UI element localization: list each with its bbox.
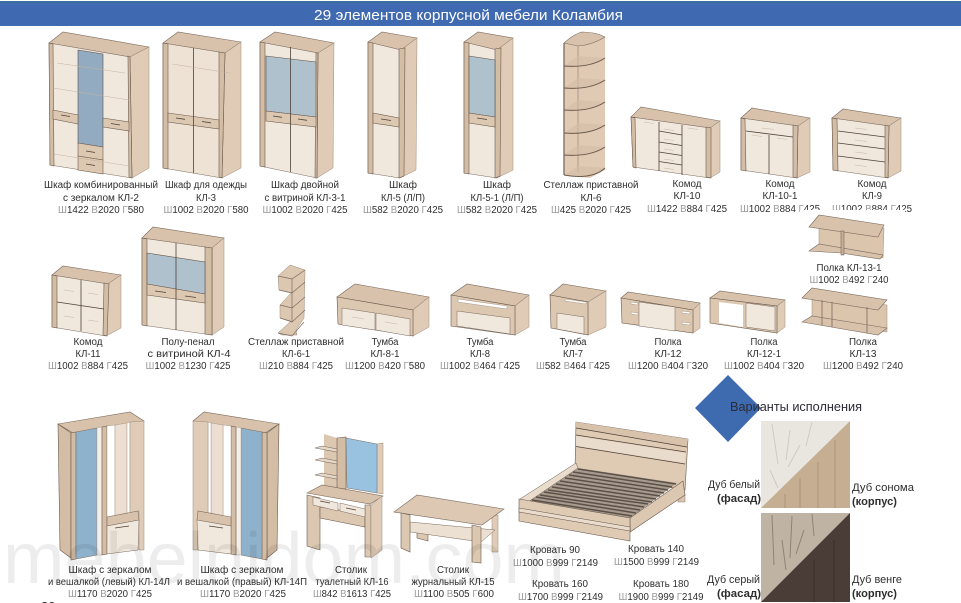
label KL-6: КЛ-6 bbox=[580, 193, 602, 204]
label KL-3: Шкаф для одежды bbox=[165, 179, 247, 191]
label KL-5-1: КЛ-5-1 (Л/П) bbox=[470, 193, 524, 204]
label: sonoma oak body: Дуб сонома bbox=[852, 482, 915, 494]
label: white oak facade: Дуб белый bbox=[708, 479, 760, 491]
label KL-5-1: Шкаф bbox=[483, 179, 511, 191]
wall shelf KL-12-1 bbox=[710, 291, 785, 333]
label KL-3 bbox=[164, 179, 249, 216]
label KL-13: Полка bbox=[849, 337, 877, 348]
label KL-14L bbox=[48, 564, 170, 600]
label KL-4: Полу-пенал bbox=[162, 337, 215, 348]
wardrobe KL-5 bbox=[368, 32, 417, 178]
label KL-8-1: Ш1200 В420 Г580 bbox=[345, 361, 425, 372]
label KL-15: Ш1100 В505 Г600 bbox=[414, 589, 494, 600]
label: wenge oak body bbox=[852, 574, 902, 600]
label KL-7 bbox=[536, 336, 610, 372]
label KL-6: Ш425 В2020 Г425 bbox=[551, 205, 631, 216]
label KL-12 bbox=[628, 337, 708, 372]
label KL-9: КЛ-9 bbox=[862, 191, 882, 202]
label KL-5: Ш582 В2020 Г425 bbox=[363, 205, 443, 216]
label KL-6-1: КЛ-6-1 bbox=[282, 349, 310, 360]
label KL-7: Ш582 В464 Г425 bbox=[536, 361, 610, 372]
label KL-16: туалетный КЛ-16 bbox=[316, 577, 389, 588]
label bed 180: Ш1900 В999 Г2149 bbox=[618, 592, 704, 603]
label KL-6: Стеллаж приставной bbox=[544, 180, 638, 191]
label KL-2: Ш1422 В2020 Г580 bbox=[58, 205, 144, 216]
label KL-3: КЛ-3 bbox=[196, 193, 216, 204]
label KL-13-1 bbox=[810, 263, 889, 286]
half cabinet KL-4 bbox=[142, 227, 224, 335]
label KL-13: Ш1200 В492 Г240 bbox=[823, 361, 903, 372]
label KL-12-1: КЛ-12-1 bbox=[747, 349, 781, 360]
label KL-10-1: КЛ-10-1 bbox=[762, 191, 798, 202]
wall shelf KL-13-1 bbox=[809, 215, 884, 259]
white backing of shelf KL-13-1 bbox=[800, 210, 905, 220]
label KL-10: КЛ-10 bbox=[674, 191, 701, 202]
TV stand KL-8 bbox=[451, 284, 529, 335]
label bed 160: Ш1700 В999 Г2149 bbox=[518, 592, 603, 603]
label KL-9 bbox=[832, 179, 912, 215]
label KL-9: Ш1002 В884 Г425 bbox=[832, 204, 912, 215]
label KL-10: Комод bbox=[672, 179, 702, 190]
label: wenge oak body: (корпус) bbox=[852, 588, 897, 600]
wardrobe KL-3 bbox=[163, 32, 241, 178]
label KL-6-1 bbox=[248, 337, 344, 372]
label bed 140 bbox=[614, 544, 699, 568]
label KL-8 bbox=[440, 336, 520, 372]
wall shelf KL-12 bbox=[621, 292, 700, 333]
label KL-8-1 bbox=[345, 336, 425, 372]
label KL-5 bbox=[363, 179, 443, 216]
corner shelving KL-6 bbox=[564, 32, 605, 178]
bed bbox=[519, 422, 688, 541]
label KL-4 bbox=[146, 337, 231, 372]
label: sonoma oak body bbox=[852, 482, 915, 508]
label bed 90: Кровать 90 bbox=[530, 545, 580, 556]
label KL-6-1: Стеллаж приставной bbox=[248, 337, 344, 348]
label KL-8: Ш1002 В464 Г425 bbox=[440, 361, 520, 372]
label KL-13-1: Полка КЛ-13-1 bbox=[816, 263, 882, 274]
coffee table KL-15 bbox=[394, 495, 504, 563]
label KL-14P: Шкаф с зеркалом bbox=[200, 564, 284, 576]
label KL-9: Комод bbox=[858, 179, 887, 190]
label KL-8: Тумба bbox=[466, 336, 494, 348]
chest of drawers KL-9 bbox=[832, 109, 901, 178]
TV stand KL-7 bbox=[550, 284, 606, 335]
heading: finish options: Варианты исполнения bbox=[730, 400, 862, 414]
label KL-11: КЛ-11 bbox=[76, 349, 101, 360]
label KL-3-1: Шкаф двойной bbox=[271, 179, 339, 191]
label bed 180 bbox=[618, 579, 704, 603]
label KL-13: КЛ-13 bbox=[850, 349, 877, 360]
label KL-3-1: Ш1002 В2020 Г425 bbox=[262, 205, 348, 216]
label KL-8-1: КЛ-8-1 bbox=[370, 349, 400, 360]
wardrobe KL-14L bbox=[58, 412, 144, 560]
diamond accent bbox=[695, 375, 761, 442]
label KL-8: КЛ-8 bbox=[470, 349, 490, 360]
swatch: grey oak / wenge bbox=[761, 513, 850, 602]
label KL-12: КЛ-12 bbox=[654, 349, 682, 360]
label KL-4: с витриной КЛ-4 bbox=[148, 349, 231, 360]
TV stand KL-8-1 bbox=[337, 284, 429, 336]
label KL-16 bbox=[313, 565, 391, 600]
label KL-13 bbox=[823, 337, 903, 372]
label KL-5-1 bbox=[457, 179, 537, 216]
label KL-3-1 bbox=[262, 179, 348, 216]
label KL-14L: Шкаф с зеркалом bbox=[68, 564, 152, 576]
swatch: white oak / sonoma oak bbox=[761, 421, 850, 508]
title banner: 29 элементов корпусной мебели Коламбия bbox=[314, 7, 623, 24]
label bed 160: Кровать 160 bbox=[532, 579, 588, 590]
label KL-12-1 bbox=[724, 337, 804, 372]
label bed 160 bbox=[518, 579, 603, 603]
label KL-11: Ш1002 В884 Г425 bbox=[48, 361, 128, 372]
label KL-14P bbox=[177, 564, 307, 600]
label KL-12-1: Ш1002 В404 Г320 bbox=[724, 361, 804, 372]
label KL-15 bbox=[412, 565, 495, 600]
dressing table KL-16 bbox=[307, 434, 383, 558]
label KL-7: КЛ-7 bbox=[563, 349, 583, 360]
label KL-2 bbox=[44, 179, 158, 216]
label: white oak facade: (фасад) bbox=[717, 493, 761, 505]
label: white oak facade bbox=[708, 479, 761, 505]
label: grey oak facade: Дуб серый bbox=[707, 574, 760, 586]
label KL-12: Ш1200 В404 Г320 bbox=[628, 361, 708, 372]
label KL-16: Столик bbox=[335, 565, 368, 576]
chest of drawers KL-11 bbox=[52, 266, 121, 336]
label bed 90: Ш1000 В999 Г2149 bbox=[513, 558, 598, 569]
label KL-8-1: Тумба bbox=[372, 336, 399, 348]
chest of drawers KL-10-1 bbox=[741, 108, 810, 178]
label KL-5: Шкаф bbox=[389, 179, 417, 191]
label KL-15: журнальный КЛ-15 bbox=[412, 577, 495, 588]
label KL-11: Комод bbox=[74, 337, 103, 348]
label KL-12: Полка bbox=[654, 337, 682, 348]
label: wenge oak body: Дуб венге bbox=[852, 574, 902, 586]
label KL-3-1: с витриной КЛ-3-1 bbox=[264, 193, 346, 204]
label: sonoma oak body: (корпус) bbox=[852, 496, 897, 508]
label KL-10: Ш1422 В884 Г425 bbox=[647, 204, 727, 215]
wall shelf KL-13 bbox=[802, 288, 887, 335]
label KL-14L: Ш1170 В2020 Г425 bbox=[68, 589, 152, 600]
wardrobe KL-14P bbox=[193, 412, 279, 560]
label bed 140: Ш1500 В999 Г2149 bbox=[614, 557, 699, 568]
label KL-5: КЛ-5 (Л/П) bbox=[381, 193, 425, 204]
label KL-14L: и вешалкой (левый) КЛ-14Л bbox=[48, 577, 170, 588]
label KL-15: Столик bbox=[437, 565, 470, 576]
label KL-14P: и вешалкой (правый) КЛ-14П bbox=[177, 577, 307, 588]
label KL-2: Шкаф комбинированный bbox=[44, 179, 158, 191]
label bed 90 bbox=[513, 545, 598, 569]
wardrobe KL-3-1 bbox=[260, 32, 334, 178]
label KL-10-1: Ш1002 В884 Г425 bbox=[740, 204, 820, 215]
label KL-10-1 bbox=[740, 179, 820, 215]
label KL-10 bbox=[647, 179, 727, 215]
label KL-16: Ш842 В1613 Г425 bbox=[313, 589, 391, 600]
label: grey oak facade bbox=[707, 574, 761, 600]
label: grey oak facade: (фасад) bbox=[717, 588, 761, 600]
label bed 140: Кровать 140 bbox=[628, 544, 684, 555]
label KL-13-1: Ш1002 В492 Г240 bbox=[810, 275, 889, 286]
label KL-6 bbox=[544, 180, 638, 216]
label KL-12-1: Полка bbox=[750, 337, 778, 348]
shelving KL-6-1 bbox=[278, 265, 305, 336]
label KL-14P: Ш1170 В2020 Г425 bbox=[200, 589, 286, 600]
label KL-5-1: Ш582 В2020 Г425 bbox=[457, 205, 537, 216]
label KL-7: Тумба bbox=[560, 336, 587, 348]
label KL-11 bbox=[48, 337, 128, 372]
label KL-4: Ш1002 В1230 Г425 bbox=[146, 361, 231, 372]
wardrobe KL-2 bbox=[49, 32, 149, 178]
chest of drawers KL-10 bbox=[631, 107, 720, 178]
label KL-3: Ш1002 В2020 Г580 bbox=[164, 205, 249, 216]
label bed 180: Кровать 180 bbox=[633, 579, 689, 590]
label KL-2: с зеркалом КЛ-2 bbox=[63, 193, 139, 204]
label KL-6-1: Ш210 В884 Г425 bbox=[259, 361, 333, 372]
watermark: mebelnidom.com bbox=[3, 519, 565, 599]
title banner bbox=[0, 1, 961, 26]
wardrobe KL-5-1 bbox=[464, 32, 513, 178]
label KL-10-1: Комод bbox=[766, 179, 795, 190]
